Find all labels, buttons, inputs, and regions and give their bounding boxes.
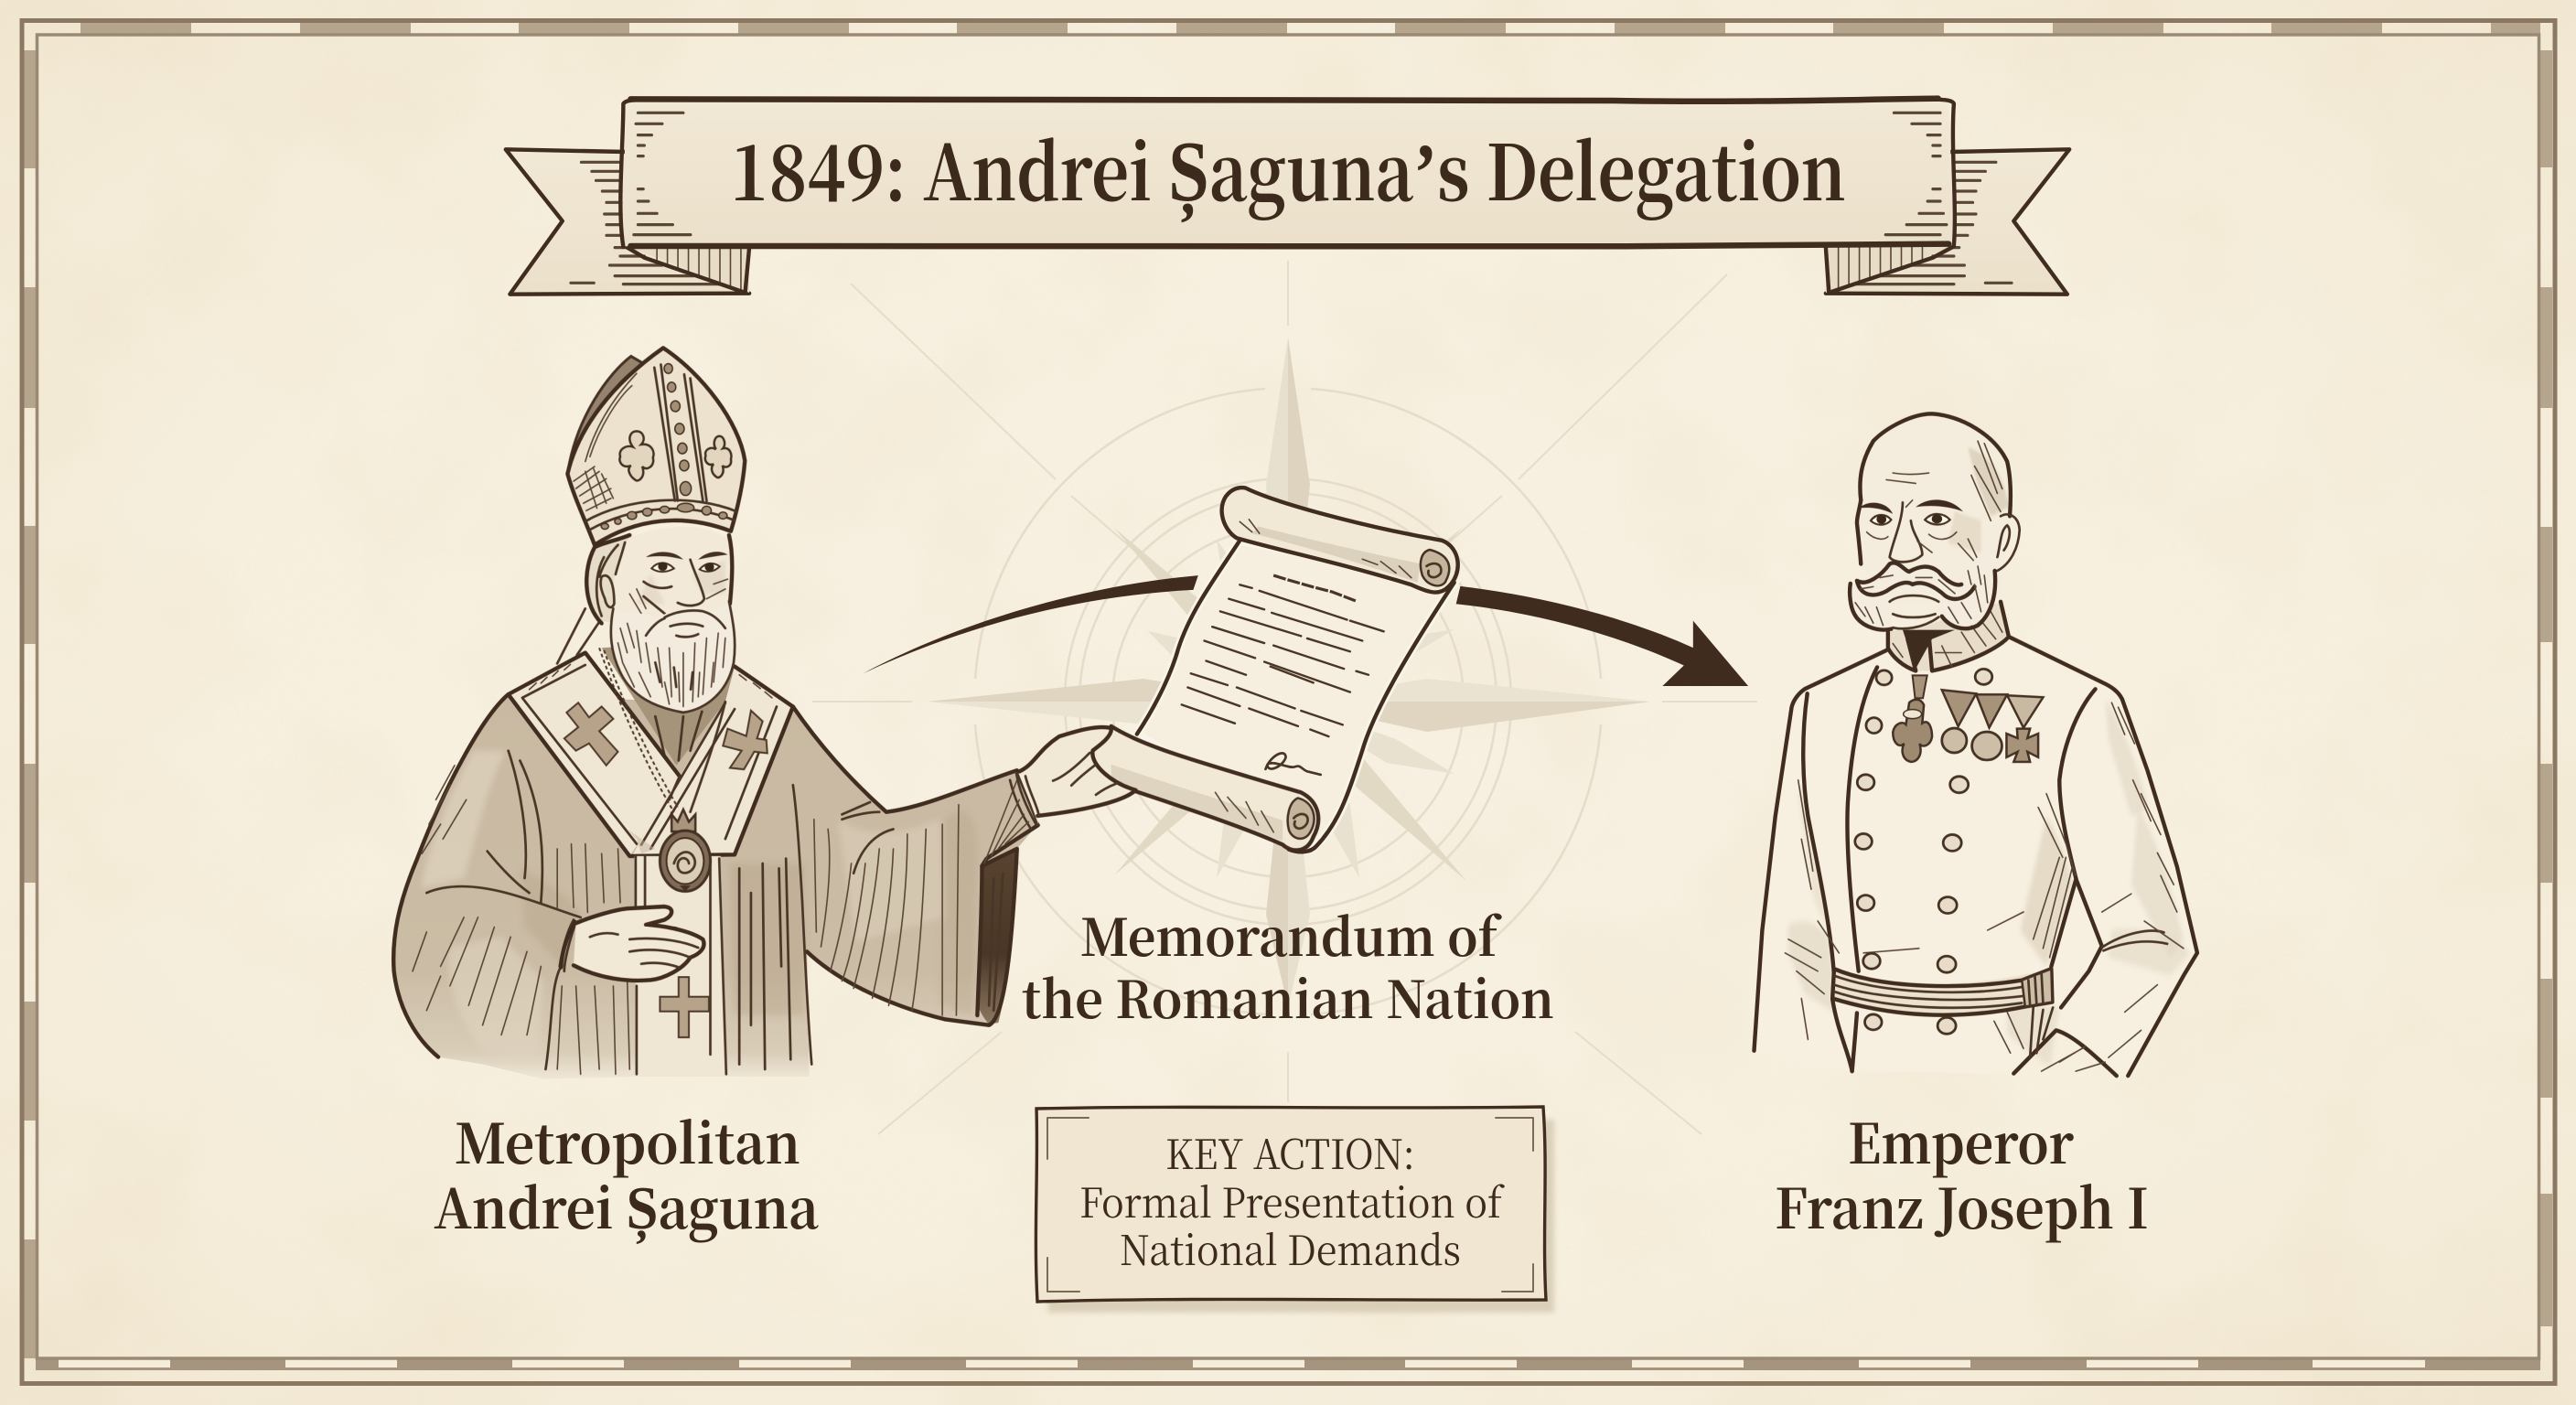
- label: Memorandum of the Romanian Nation: Memorandum of: [1080, 898, 1502, 971]
- label: Metropolitan Andrei Șaguna: [434, 1101, 819, 1245]
- background compass rose: [812, 261, 1757, 1134]
- label: Memorandum of the Romanian Nation: [1022, 898, 1554, 1034]
- uniform coat: [1754, 637, 2197, 1076]
- figure: Emperor Franz Joseph I: [1754, 413, 2197, 1076]
- callout: key action box: KEY ACTION:: [1165, 1121, 1415, 1181]
- moustache and whiskers: [1849, 548, 1996, 630]
- chain and pectoral medallion: [599, 648, 725, 891]
- collar: [1888, 602, 2009, 670]
- banner right tail: [1826, 149, 2069, 295]
- figure: Metropolitan Andrei Șaguna: [393, 348, 1038, 1079]
- scroll: Memorandum document held by Șaguna: [1016, 488, 1458, 852]
- callout: key action box: [1036, 1107, 1554, 1313]
- beard: [611, 601, 735, 713]
- title text: 1849: Andrei Șaguna’s Delegation: [730, 113, 1846, 223]
- mitre: [567, 348, 745, 545]
- head: [1857, 413, 2020, 630]
- upper hand holding scroll: [1016, 727, 1135, 825]
- scroll text lines: [1182, 575, 1384, 775]
- robe fold hatching: [413, 766, 1028, 1074]
- central panel with lower cross: [634, 856, 727, 1077]
- coat buttons: [1855, 669, 1992, 1034]
- callout: key action box: National Demands: [1120, 1217, 1461, 1277]
- bottom roll: [1091, 726, 1318, 851]
- scroll body: [1137, 541, 1454, 852]
- label: Memorandum of the Romanian Nation: the Romanian Nation: [1022, 960, 1554, 1034]
- label: Metropolitan Andrei Șaguna: Andrei Șaguna: [434, 1166, 819, 1245]
- waist sash: [1832, 969, 2052, 1015]
- callout: key action box: Formal Presentation of: [1079, 1170, 1505, 1229]
- medals: [1942, 690, 2043, 762]
- banner main panel: [620, 99, 1955, 247]
- label: Metropolitan Andrei Șaguna: Metropolitan: [455, 1101, 800, 1180]
- neck cross medal: [1893, 675, 1932, 762]
- collar and stole: [509, 643, 793, 856]
- robe: [393, 694, 1038, 1079]
- top roll: [1222, 488, 1458, 593]
- label: Emperor Franz Joseph I: Franz Joseph I: [1775, 1166, 2149, 1245]
- label: Emperor Franz Joseph I: Emperor: [1848, 1101, 2074, 1180]
- banner folds: [626, 246, 1954, 293]
- banner left tail: [506, 149, 749, 295]
- title banner: [506, 99, 2069, 295]
- arrow from Șaguna to Franz Joseph: [864, 575, 1748, 686]
- head and face: [557, 527, 732, 663]
- label: Emperor Franz Joseph I: [1775, 1101, 2149, 1245]
- stole crosses: [564, 702, 767, 769]
- lower hand: [561, 906, 703, 981]
